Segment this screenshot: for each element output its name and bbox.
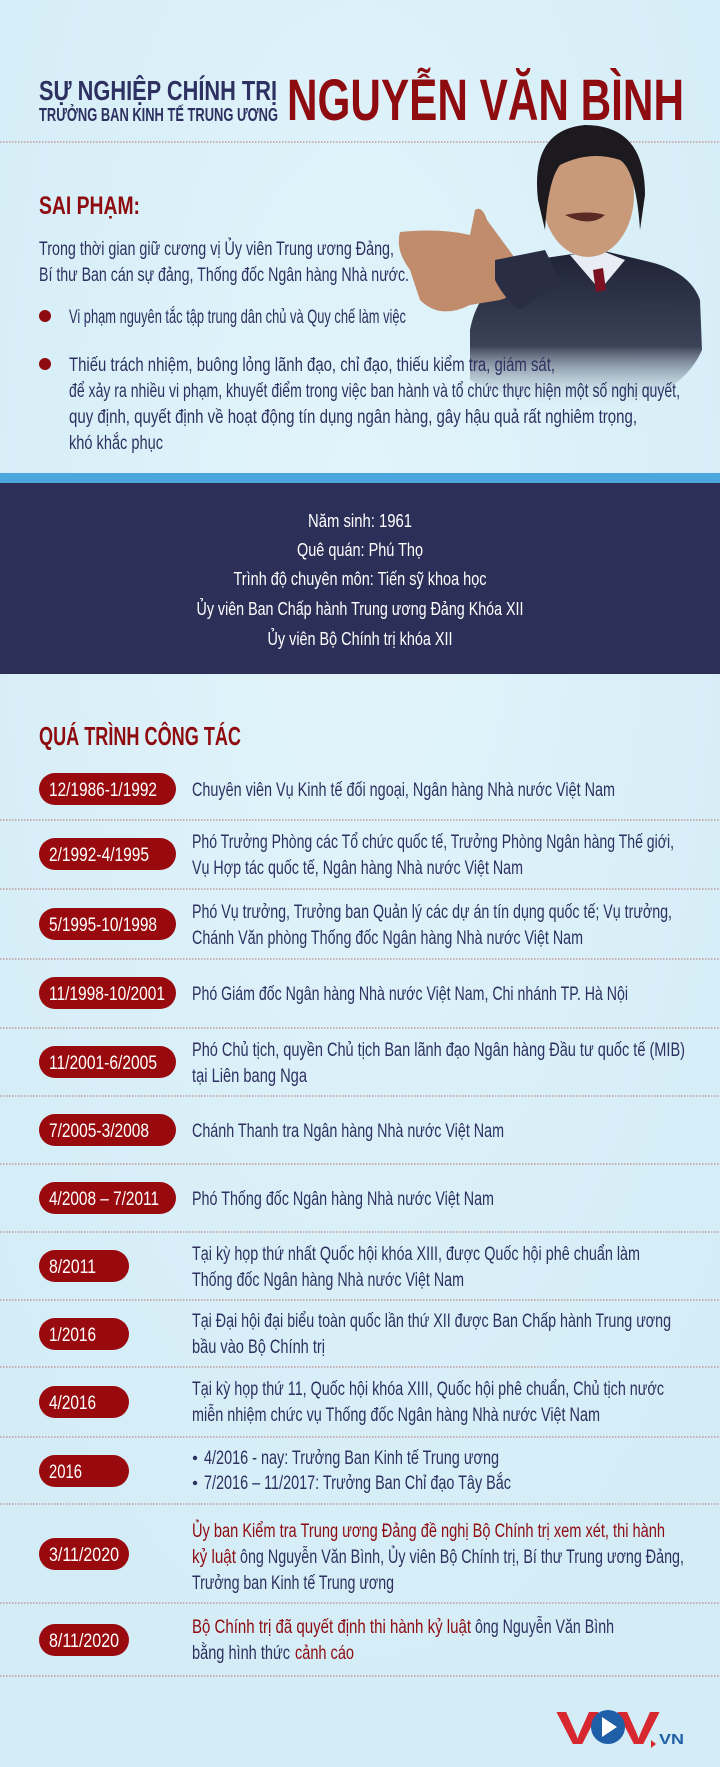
row 11: 4/2016 - nay: Trưởng Ban Kinh tế Trung ương xyxy=(204,1448,499,1469)
timeline xyxy=(39,773,685,1664)
row 5: tại Liên bang Nga xyxy=(192,1066,307,1087)
row 12: kỷ luật xyxy=(192,1547,237,1568)
row 8: 8/2011 xyxy=(49,1257,96,1278)
panel: profile info xyxy=(0,473,720,674)
row 10 xyxy=(39,1379,664,1426)
bullet list: violations: Vi phạm nguyên tắc tập trung dân chủ và Quy chế làm việc xyxy=(69,306,406,328)
row 6: 7/2005-3/2008 xyxy=(49,1121,149,1142)
title: SỰ NGHIỆP CHÍNH TRỊ xyxy=(39,75,277,106)
row 13 xyxy=(39,1616,614,1664)
title xyxy=(39,68,684,133)
row 2: 2/1992-4/1995 xyxy=(49,845,149,866)
panel: profile info: Ủy viên Ban Chấp hành Trung ương Đảng Khóa XII xyxy=(196,598,524,619)
row 7 xyxy=(39,1182,494,1214)
row 6 xyxy=(39,1114,504,1146)
row 8: Thống đốc Ngân hàng Nhà nước Việt Nam xyxy=(192,1270,464,1291)
row 10: miễn nhiệm chức vụ Thống đốc Ngân hàng Nhà nước Việt Nam xyxy=(192,1404,600,1426)
logo: VOV.VN: V V xyxy=(556,1702,660,1754)
row 5: 11/2001-6/2005 xyxy=(49,1053,157,1074)
row 11: 7/2016 – 11/2017: Trưởng Ban Chỉ đạo Tây Bắc xyxy=(204,1472,511,1494)
heading: sai phạm: SAI PHẠM: xyxy=(39,192,140,220)
row 3 xyxy=(39,902,672,949)
row 12: 3/11/2020 xyxy=(49,1545,119,1566)
text block: sai phạm intro: Trong thời gian giữ cương vị Ủy viên Trung ương Đảng, xyxy=(39,238,394,260)
row 12 xyxy=(39,1520,684,1594)
row 7: Phó Thống đốc Ngân hàng Nhà nước Việt Nam xyxy=(192,1189,494,1210)
text block: sai phạm intro: Bí thư Ban cán sự đảng, Thống đốc Ngân hàng Nhà nước. xyxy=(39,265,409,286)
row 9 xyxy=(39,1311,671,1358)
row 1 xyxy=(39,773,615,805)
row 1: 12/1986-1/1992 xyxy=(49,780,157,801)
bullet list: violations xyxy=(39,306,680,454)
row 9: 1/2016 xyxy=(49,1325,96,1346)
row 13: bằng hình thức xyxy=(192,1642,290,1664)
row 5 xyxy=(39,1040,685,1087)
heading: quá trình công tác: QUÁ TRÌNH CÔNG TÁC xyxy=(39,721,241,751)
panel: profile info: Ủy viên Bộ Chính trị khóa XII xyxy=(268,628,452,649)
row 8 xyxy=(39,1244,640,1291)
row 12: Trưởng ban Kinh tế Trung ương xyxy=(192,1573,394,1594)
row 13: ông Nguyễn Văn Bình xyxy=(475,1616,614,1638)
row 13: Bộ Chính trị đã quyết định thi hành kỷ luật xyxy=(192,1617,472,1638)
row 13: 8/11/2020 xyxy=(49,1631,119,1652)
row 11: 2016 xyxy=(49,1462,82,1483)
row 11 xyxy=(39,1448,511,1494)
row 2: Vụ Hợp tác quốc tế, Ngân hàng Nhà nước Việt Nam xyxy=(192,858,523,879)
row 4: 11/1998-10/2001 xyxy=(49,984,165,1005)
row 13: cảnh cáo xyxy=(295,1643,354,1664)
logo: VOV.VN xyxy=(556,1702,684,1754)
row 3: 5/1995-10/1998 xyxy=(49,915,157,936)
title: TRƯỞNG BAN KINH TẾ TRUNG ƯƠNG xyxy=(39,104,278,125)
row 2 xyxy=(39,832,674,879)
row 3: Chánh Văn phòng Thống đốc Ngân hàng Nhà nước Việt Nam xyxy=(192,928,583,949)
bullet list: violations: Thiếu trách nhiệm, buông lỏng lãnh đạo, chỉ đạo, thiếu kiểm tra, giám sát, xyxy=(69,355,555,376)
panel: profile info: Trình độ chuyên môn: Tiến sỹ khoa học xyxy=(234,569,486,589)
panel: profile info: Quê quán: Phú Thọ xyxy=(297,540,423,560)
row 4 xyxy=(39,977,628,1009)
photo: portrait xyxy=(399,125,702,410)
bullet list: violations: khó khắc phục xyxy=(69,432,163,454)
logo: VOV.VN: VN xyxy=(659,1731,684,1748)
text block: sai phạm intro xyxy=(39,238,409,286)
panel: profile info: Năm sinh: 1961 xyxy=(308,511,412,531)
row 9: bầu vào Bộ Chính trị xyxy=(192,1337,325,1358)
row 10: 4/2016 xyxy=(49,1393,96,1414)
row 7: 4/2008 – 7/2011 xyxy=(49,1189,159,1210)
row 6: Chánh Thanh tra Ngân hàng Nhà nước Việt Nam xyxy=(192,1121,504,1142)
